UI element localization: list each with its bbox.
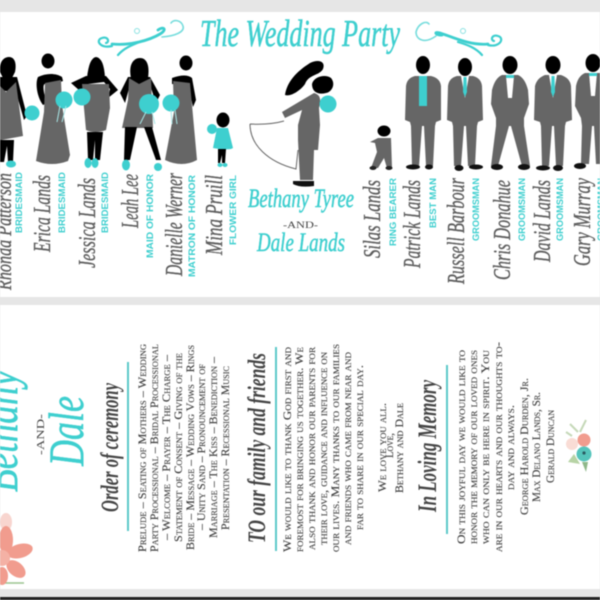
silhouette: groomsman Chris	[491, 56, 530, 170]
names: Russell Barbour	[444, 178, 481, 285]
names: Russell Barbour: GROOMSMAN	[471, 178, 481, 241]
names: Erica Lands: Erica Lands	[30, 175, 56, 253]
panel: program back	[0, 305, 600, 589]
couple names: -AND-	[283, 221, 318, 231]
names: Danielle Werner	[162, 173, 197, 277]
names: bridesmaid Rhonda Patterson: BRIDESMAID	[14, 171, 24, 233]
text: order of ceremony list: Statement of Consent – Giving of the	[173, 353, 185, 542]
text: thank you message: Love,	[384, 433, 396, 458]
text: order of ceremony list: Party Processional – Bridal Processional	[149, 344, 161, 552]
text: memorial message: George Harold Durden, Jr.	[519, 378, 531, 515]
couple names: Bethany Tyree	[248, 184, 354, 213]
names: David Lands: GROOMSMAN	[555, 178, 565, 241]
text: order of ceremony list: Prelude – Seating of Mothers – Wedding	[137, 344, 149, 552]
names: Mina Pruill: Mina Pruill	[202, 175, 228, 256]
names: Erica Lands: BRIDESMAID	[57, 171, 67, 233]
text: thank you message: our lives. Many thanks to our families	[330, 344, 342, 552]
text: memorial message: honor the memory of our loved ones	[468, 350, 480, 544]
heading: Bethany and Dale: -AND-	[35, 414, 47, 455]
text: memorial message: who can only be here in spirit. You	[480, 350, 492, 544]
silhouette: ring bearer	[370, 126, 392, 170]
names: Jessica Lands	[75, 171, 110, 268]
heading: Bethany and Dale: Dale	[38, 396, 94, 467]
names: Silas Lands: RING BEARER	[388, 177, 398, 246]
icon: coral flower	[0, 513, 34, 585]
divider lines	[127, 347, 448, 551]
names: Leah Lee: MAID OF HONOR	[145, 173, 155, 258]
names: Russell Barbour: Russell Barbour	[444, 178, 470, 285]
text: order of ceremony list	[137, 344, 232, 552]
names: Patrick Lands	[400, 178, 438, 269]
text: thank you message: We love you all.	[377, 403, 389, 492]
silhouette: bridesmaid 3	[71, 57, 118, 168]
names: Chris Donahue: Chris Donahue	[490, 180, 516, 280]
names: Gary Murray: Gary Murray	[570, 178, 596, 266]
names: David Lands: David Lands	[530, 180, 556, 263]
text: memorial message: Max Delano Lands, Sr.	[531, 392, 543, 502]
names: Silas Lands: Silas Lands	[360, 180, 386, 258]
text: thank you message: also thank and honor our parents for	[306, 346, 318, 550]
text: memorial message: Gerald Duncan	[545, 410, 557, 483]
text: thank you message: foremost for bringing us together. We	[294, 347, 306, 552]
text: order of ceremony list: Marriage – The Kiss – Benediction –	[208, 357, 220, 538]
silhouette: groomsman Russell	[447, 58, 483, 171]
names: Leah Lee	[118, 173, 155, 258]
names: Erica Lands	[30, 171, 67, 253]
names: Jessica Lands: Jessica Lands	[75, 178, 101, 268]
names: Gary Murray	[570, 178, 600, 266]
silhouette: flower girl	[207, 112, 233, 167]
names: Danielle Werner: MATRON OF HONOR	[187, 174, 197, 277]
names: Patrick Lands: Patrick Lands	[400, 180, 426, 269]
names: David Lands	[530, 178, 565, 263]
names: Chris Donahue	[490, 178, 527, 280]
icon: small floral	[566, 420, 592, 472]
names: Jessica Lands: BRIDESMAID	[100, 171, 110, 233]
couple names	[248, 184, 354, 257]
silhouette: maid of honor	[120, 58, 162, 171]
icon: right swirl	[416, 22, 501, 55]
title: The Wedding Party	[200, 13, 400, 55]
text: order of ceremony list: – Welcome – Prayer – The Charge –	[161, 355, 173, 541]
silhouette: matron of honor	[162, 56, 197, 164]
text: memorial message: day and always.	[505, 405, 517, 490]
text: memorial message: On this joyful day we would like to	[456, 350, 468, 544]
text: thank you message: We would like to thank God first and	[282, 347, 294, 552]
text: order of ceremony list: Presentation – Recessional Music	[220, 366, 232, 530]
silhouette: groomsman Gary	[574, 54, 600, 169]
names: Silas Lands	[360, 177, 398, 258]
names: Mina Pruill: FLOWER GIRL	[228, 174, 238, 245]
panel: wedding party	[0, 12, 600, 297]
silhouette: bride and groom	[250, 61, 336, 187]
silhouette: bridesmaid 1	[0, 57, 40, 168]
names: bridesmaid Rhonda Patterson	[0, 171, 24, 291]
text: order of ceremony list: Bride – Message – Wedding Vows – Rings	[185, 345, 197, 550]
heading: Bethany and Dale	[0, 369, 94, 492]
text: memorial message: are in our hearts and our thoughts to-	[493, 342, 505, 552]
silhouette: bridesmaid 2	[36, 54, 72, 164]
text: thank you message	[282, 344, 406, 552]
names: Chris Donahue: GROOMSMAN	[517, 178, 527, 241]
text: thank you message: their love, guidance and influence on	[318, 352, 330, 545]
heading: in loving memory: In Loving Memory	[413, 380, 442, 513]
heading: order of ceremony: Order of ceremony	[97, 382, 124, 512]
text: order of ceremony list: – Unity Sand – Pronouncement of	[196, 363, 208, 531]
text: thank you message: far to share in our special day.	[354, 365, 366, 530]
names: Leah Lee: Leah Lee	[118, 174, 144, 229]
names: Patrick Lands: BEST MAN	[428, 178, 438, 228]
text: thank you message: Bethany and Dale	[394, 403, 406, 493]
silhouette: best man	[405, 56, 441, 170]
heading: to our family and friends: TO our family and friends	[244, 353, 271, 543]
text: thank you message: and friends who came from near and	[342, 352, 354, 545]
names: Danielle Werner: Danielle Werner	[162, 173, 188, 277]
icon: left swirl	[99, 21, 183, 55]
names: Mina Pruill	[202, 174, 238, 256]
couple names: Dale Lands	[256, 228, 345, 257]
text: memorial message	[456, 342, 557, 552]
silhouette: groomsman David	[534, 56, 572, 171]
